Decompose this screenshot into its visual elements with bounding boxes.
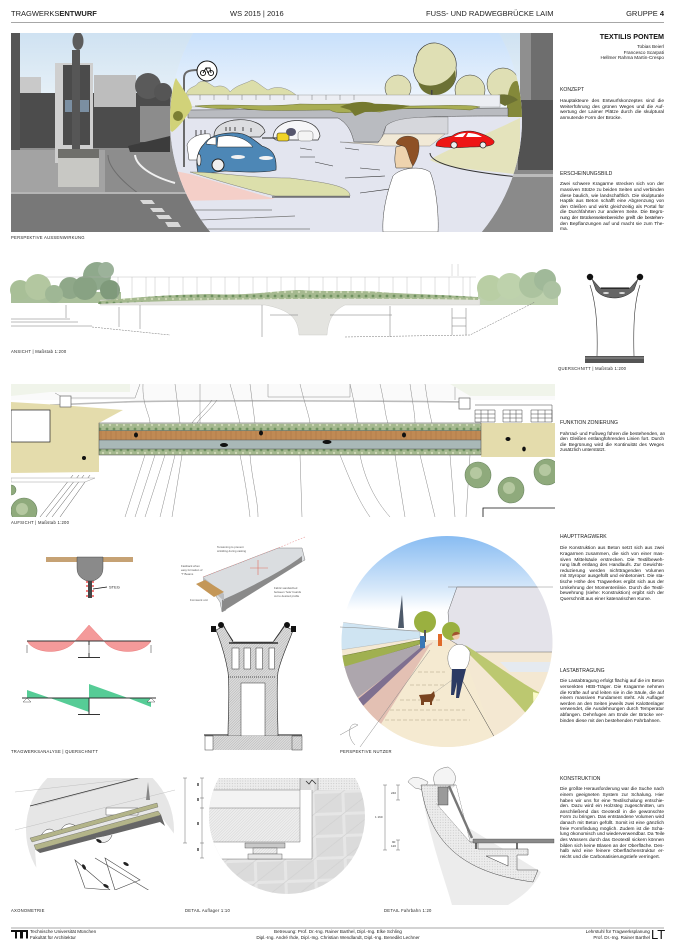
right green [430, 118, 520, 175]
text: Funktion: Fahrrad- und Fußweg führen die bestehenden, an [560, 432, 665, 436]
footer: LT logo: LT [651, 927, 665, 942]
footer: supervision: Betreuung: Prof. Dr.-Ing. Rainer Barthel, Dipl.-Ing. Elke Schling [274, 929, 402, 934]
footer: university: Fakultät für Architektur [30, 935, 76, 940]
plants [408, 767, 455, 790]
text: Konstruktion: bilden sich keine Blasen an der Oberfläche. Des- [560, 844, 664, 849]
text: Erscheinungsbild: Zwei schwere Kragarme strecken sich von der [560, 182, 664, 187]
photo background [11, 32, 553, 232]
caption: axonometry: AXONOMETRIE [11, 908, 45, 912]
formwork isometric: Tensioning to prevent [217, 545, 244, 549]
curb strip [340, 134, 445, 146]
footer: supervision [256, 929, 420, 940]
text: Haupttragwerk: reduzierung werden nichttragenden Volumen [560, 569, 664, 574]
bridge plan deck [99, 423, 481, 424]
railing strut [449, 786, 472, 838]
text: Erscheinungsbild: nung der Brückenseitenbereiche greift die bestehen- [560, 216, 664, 221]
concrete section [421, 785, 538, 882]
building with glazing [475, 405, 552, 422]
text: Erscheinungsbild: die Durchfahrten zur anderen Seite. Die Begrü- [560, 210, 664, 215]
trees right [477, 269, 561, 305]
pink pavement [178, 172, 274, 201]
text: Konstruktion: reicht und die Carbonatisierungstiefe verringert. [560, 855, 660, 860]
bridge structure [188, 108, 508, 142]
heading: Erscheinungsbild: ERSCHEINUNGSBILD [560, 171, 612, 177]
crossing lines [190, 210, 310, 229]
footer: chair [586, 929, 650, 940]
structural analysis diagrams [22, 537, 305, 750]
text: Lastabtragung: die Kräfte auf und leiten sie in die Säule, die auf [560, 690, 664, 696]
text: Haupttragwerk [560, 546, 664, 602]
detail: roadway cantilever: 90 [392, 840, 396, 844]
caption: elevation: ANSICHT | Maßstab 1:200 [11, 348, 66, 354]
caption: plan: AUFSICHT | Maßstab 1:200 [11, 520, 69, 524]
text: Haupttragwerk: Kragarmen zusammen, die sich von einer mas- [560, 552, 664, 557]
large trees right [414, 43, 456, 90]
yellow car [277, 133, 289, 141]
text: Konstruktion: den. Dazu wird ein Holzsteg zugeschnitten, um [560, 804, 664, 809]
red car [436, 131, 494, 148]
deck plank [473, 839, 554, 843]
footer rule [11, 927, 664, 929]
formwork isometric: Fastback when [181, 564, 200, 568]
text: Lastabtragung [560, 678, 664, 724]
text: Konstruktion: einem geeigneten System zur Schalung. Hier [560, 793, 664, 798]
caption: exterior: PERSPEKTIVE AUSSENWIRKUNG [11, 234, 85, 240]
shadows [81, 838, 129, 889]
text: Erscheinungsbild: den Bepflanzungen auf und macht sie zum The- [560, 222, 664, 227]
text: Haupttragwerk: Querschnitt aus einer katenarischen Kurve. [560, 597, 651, 602]
text: Erscheinungsbild: ma. [560, 227, 568, 232]
dimension line [183, 778, 204, 858]
text: Lastabtragung: versenkten HEB-Träger. Die Kragarme nehmen [560, 685, 664, 690]
left tree near sign [169, 78, 192, 132]
text: Lastabtragung: binden diese mit den bestehenden Fahrbahnen. [560, 719, 661, 724]
formwork isometric: Formwork unit [190, 598, 208, 602]
dog [419, 691, 435, 705]
text: Erscheinungsbild: den Gleißen und wirkt gleichzeitig als Portal für [560, 205, 664, 210]
white car [187, 134, 212, 160]
formwork isometric: wrinkling during casting [217, 549, 247, 553]
track lines [40, 384, 470, 517]
axonometric drawing [15, 778, 175, 897]
underpass [384, 117, 448, 134]
sign post [184, 70, 198, 167]
text: Haupttragwerk: Umkehrung der Momentenlinie. Durch die Textil- [560, 586, 664, 591]
formwork isometric: easy formation of [181, 568, 203, 572]
sketch circle [160, 33, 540, 232]
cross section: Querschnitt [585, 274, 644, 363]
text: Lastabtragung: werden an den Seiten jeweils zwei Kalottenlager [560, 702, 664, 707]
text: Haupttragwerk: mit Styropor ausgefüllt und einbetoniert. Die sta- [560, 574, 664, 579]
planting on deck [98, 290, 478, 304]
trees in plan [11, 458, 555, 517]
pier [146, 782, 150, 800]
authors: Tobias Beierl [637, 44, 664, 49]
text: Erscheinungsbild: Haptik aus Beton schafft eine Abgrenzung von [560, 199, 664, 204]
dark hedge patch [340, 102, 410, 116]
text: Lastabtragung: Die Lastabtragung erfolgt flächig auf die im Beton [560, 679, 664, 684]
text: Haupttragwerk: Die Konstruktion aus Beton setzt sich aus zwei [560, 546, 664, 551]
formwork isometric: between 'hole' boards [274, 590, 302, 594]
heading: Lastabtragung: LASTABTRAGUNG [560, 668, 605, 674]
footer: supervision: Dipl.-Ing. André Ihde, Dipl.-Ing. Christian Wendlandt, Dipl.-Ing. Benedikt Lechner [256, 935, 420, 940]
header: group: GRUPPE 4 [626, 9, 664, 18]
people on deck [82, 430, 526, 460]
footer: university [30, 929, 96, 940]
header rule [11, 22, 664, 24]
text: Konstruktion: des Wassers durch das Geotextil sickern können [560, 838, 664, 843]
formwork isometric [181, 537, 305, 612]
bike glyph on sign [200, 68, 214, 76]
viewer man [383, 168, 438, 232]
detail: roadway cantilever [375, 767, 554, 905]
formwork isometric: Fabric sandwiched [274, 586, 298, 590]
text: Erscheinungsbild: massiven Stütze zu beiden Seiten und verbinden [560, 188, 664, 193]
pedestrians right arch [298, 131, 313, 141]
text: Funktion: die Begrünung wird die Kontinuität des Weges [560, 443, 664, 448]
text: Haupttragwerk: tische Höhe des Tragwerkes ergibt sich aus der [560, 580, 664, 585]
text: Lastabtragung: einem massiven Fundament steht. Als Auflager [560, 696, 664, 701]
heading: Konzept: KONZEPT [560, 87, 584, 93]
text: Konstruktion: freie Formfindung möglich. Zudem ist die Scha- [560, 827, 664, 832]
road surface [170, 117, 530, 232]
ground plane [35, 815, 175, 890]
arches on bridge [40, 824, 78, 838]
hedge on bridge [195, 104, 480, 113]
shear force diagram [22, 684, 156, 714]
elevation drawing: Ansicht [10, 262, 561, 337]
sketch in circle [340, 536, 553, 750]
footer: chair: Prof. Dr.-Ing. Rainer Barthel [593, 935, 650, 940]
soffit shade [423, 800, 541, 905]
text: Konstruktion: halb wird eine feinere Oberflächenstruktur er- [560, 849, 664, 854]
site plan: Aufsicht [6, 384, 560, 524]
text: Erscheinungsbild: diese baulich, wie landschaftlich. Die skulpturale [560, 194, 664, 198]
arch openings [214, 120, 265, 137]
text: Lastabtragung: verwendet, die Ausdehnungen durch Temperatur [560, 707, 664, 712]
text: Funktion: zusätzlich unterstützt. [560, 448, 606, 453]
heading: Konstruktion: KONSTRUKTION [560, 776, 600, 782]
project title: TEXTILIS PONTEM [600, 32, 664, 41]
deck and central pier [100, 297, 480, 335]
caption: bearing detail: DETAIL Auflager 1:10 [185, 908, 230, 912]
green deck [30, 803, 161, 850]
text: Konzept: wertung der Laimer Plätze durch die skulptural [560, 110, 664, 115]
text: Konstruktion: danach mit Beton gefüllt. Somit ist eine gänzlich [560, 821, 664, 826]
text: Konstruktion: haben wir uns für eine Textilschalung entschie- [560, 798, 664, 804]
green island [190, 172, 350, 196]
heading: Funktion: FUNKTION ZONIERUNG [560, 420, 618, 426]
text: Konstruktion: lung ökonomisch und wiederverwendbar. Da Teile [560, 832, 664, 837]
footer: university: Technische Universität München [30, 929, 96, 934]
text: Erscheinungsbild [560, 182, 664, 232]
bridge pier section [204, 622, 302, 750]
detail: roadway cantilever: 240 [391, 791, 396, 795]
top planting strip [11, 384, 555, 396]
text: Haupttragwerk: bewehrung (siehe: Konstruktion) ergibt sich der [560, 591, 664, 596]
background trees [186, 80, 296, 95]
text: Konzept: Weiterführung des grünen Weges und die Auf- [560, 105, 664, 110]
authors [600, 44, 664, 60]
planter [438, 787, 448, 805]
hero perspective: exterior view [11, 32, 553, 232]
heading: Haupttragwerk: HAUPTTRAGWERK [560, 534, 607, 540]
caption: analysis: TRAGWERKSANALYSE | QUERSCHNITT [11, 748, 98, 754]
text: Funktion: den Gleißen entlangführenden Linien fort. Durch [560, 437, 664, 442]
section with web (Steg) [46, 557, 133, 598]
text: Haupttragwerk: rung läuft entlang des Handlaufs. Zur Gewichts- [560, 563, 664, 568]
formwork isometric: cut to desired profile [274, 594, 300, 598]
railing [188, 95, 500, 107]
railing [45, 264, 476, 304]
header: semester: WS 2015 | 2016 [230, 9, 284, 18]
caption: cross section: QUERSCHNITT | Maßstab 1:200 [558, 366, 626, 371]
caption: roadway detail: DETAIL Fahrbahn 1:20 [384, 908, 432, 912]
footer: chair: Lehrstuhl für Tragwerksplanung [586, 929, 650, 934]
text: Konstruktion [560, 786, 664, 860]
text: Haupttragwerk: siven Mittelsäule erstrecken. Die Textilbeweh- [560, 558, 664, 562]
text: Konstruktion: anschließend das Geotextil in die gewünschte [560, 810, 664, 815]
detail: roadway cantilever: 120 [391, 844, 396, 848]
right plaza [481, 423, 555, 457]
outer sketch traces [340, 587, 553, 747]
text: Lastabtragung: abfangen. Dehnfugen am Ende der Brücke ver- [560, 713, 664, 718]
formwork isometric: 'T' Beams [181, 572, 194, 576]
detail: bearing [183, 778, 370, 898]
header: course: TRAGWERKSENTWURF [11, 9, 97, 18]
text: Konzept: anmutende Form der Brücke. [560, 116, 622, 121]
detail: roadway cantilever: 1 160 [375, 815, 383, 819]
text: Konzept [560, 98, 664, 121]
TUM logo [11, 930, 28, 938]
text: Konstruktion: Form zu bringen. Das entstandene Volumen wird [560, 815, 664, 820]
left plaza [11, 402, 123, 473]
caption: user perspective: PERSPEKTIVE NUTZER [340, 748, 392, 754]
stair towers [60, 396, 71, 407]
text: Funktion [560, 432, 665, 453]
ground lines [11, 302, 535, 337]
walking person [448, 632, 470, 698]
user perspective [340, 536, 553, 750]
dimension lines [383, 785, 400, 850]
section with web (Steg): STEG [109, 584, 120, 590]
blue car [197, 133, 276, 173]
trees left [10, 262, 121, 303]
authors: Francesco Scarpati [624, 50, 664, 55]
header: project: FUSS- UND RADWEGBRÜCKE LAIM [426, 9, 554, 18]
road dashes [300, 148, 398, 193]
text: Konstruktion: Die größte Herausforderung war die Suche nach [560, 787, 664, 792]
text: Konzept: Hauptakteure des Entwurfskonzeptes sind die [560, 99, 664, 104]
bending moment diagram [27, 625, 151, 658]
authors: Hellmer Rahma Martin-Crespo [600, 55, 664, 60]
small pedestrians [196, 127, 252, 136]
